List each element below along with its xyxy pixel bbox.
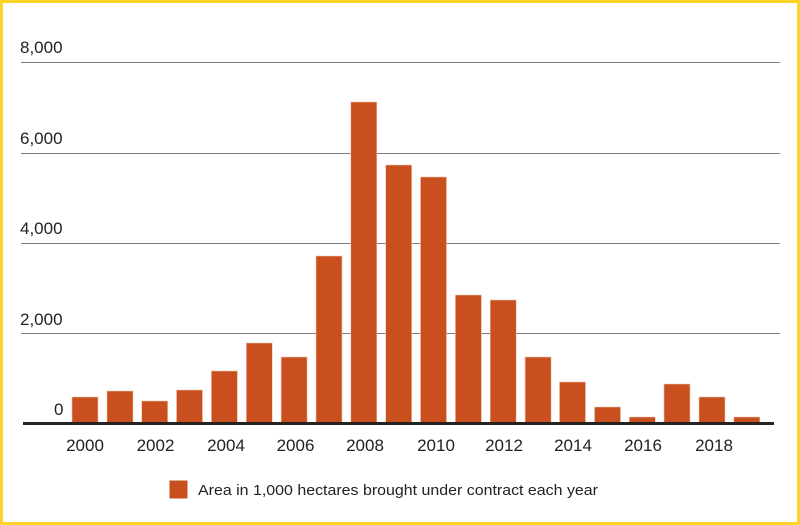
legend: Area in 1,000 hectares brought under contract each year (198, 482, 598, 499)
x-axis year labels: 2018 (695, 436, 733, 455)
x-axis year labels: 2012 (485, 436, 523, 455)
x axis line (23, 422, 774, 425)
x-axis year labels: 2016 (624, 436, 662, 455)
x-axis year labels: 2010 (417, 436, 455, 455)
y-axis labels: 0 (54, 400, 63, 419)
y-axis labels (20, 38, 63, 419)
y-axis labels: 8,000 (20, 38, 63, 57)
x-axis year labels: 2014 (554, 436, 592, 455)
x-axis year labels: 2000 (66, 436, 104, 455)
y-axis labels: 2,000 (20, 310, 63, 329)
x-axis year labels: 2002 (137, 436, 174, 455)
x-axis year labels: 2008 (346, 436, 384, 455)
x-axis year labels: 2006 (277, 436, 314, 455)
y-axis labels: 4,000 (20, 219, 63, 238)
y-axis labels: 6,000 (20, 129, 63, 148)
x-axis year labels: 2004 (207, 436, 245, 455)
x-axis year labels (66, 436, 733, 455)
bars (72, 102, 760, 423)
